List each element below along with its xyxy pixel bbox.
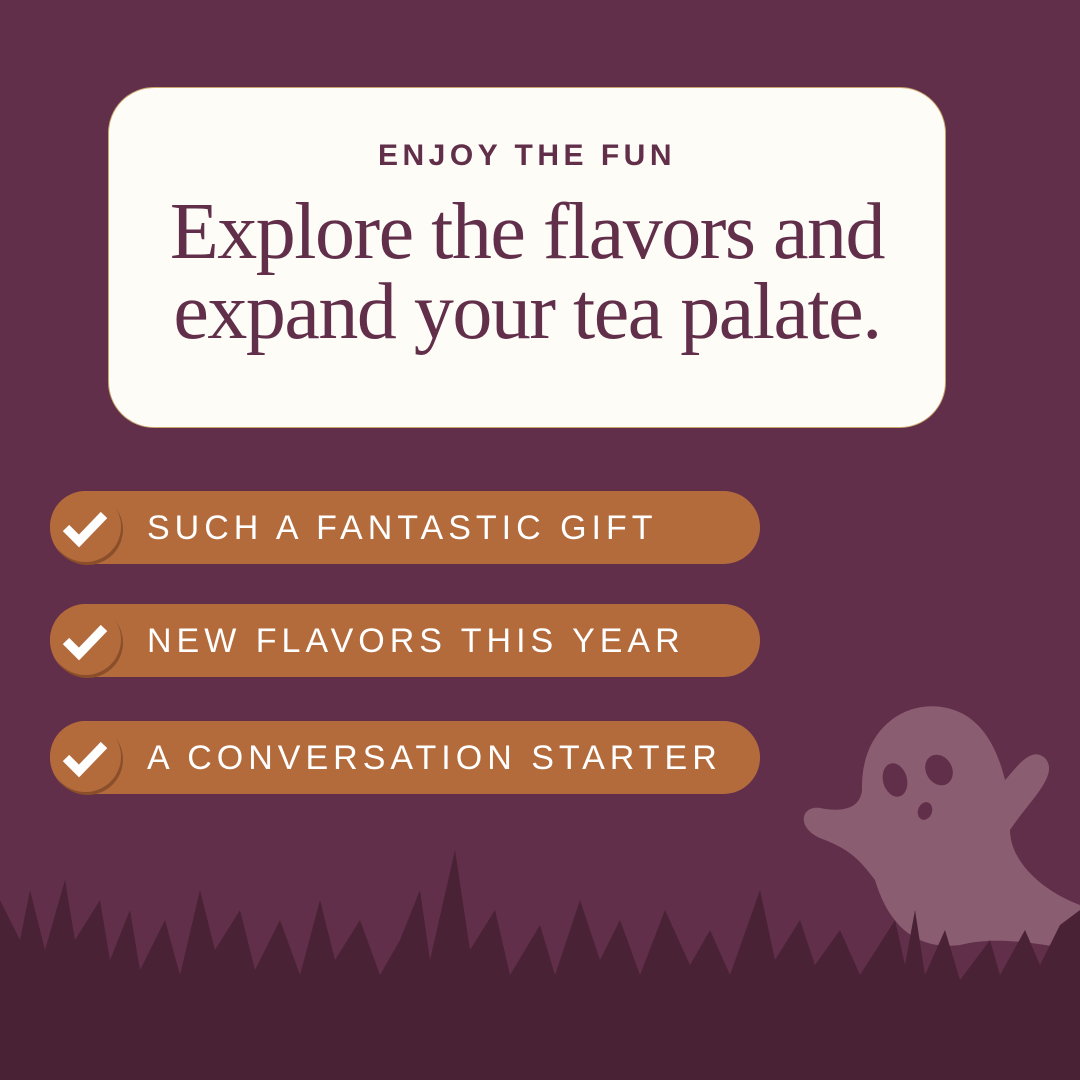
pill 3 (50, 721, 760, 794)
card: header (108, 87, 946, 428)
headline (170, 188, 885, 356)
pill 3: A CONVERSATION STARTER (147, 739, 722, 777)
kicker: ENJOY THE FUN (378, 139, 676, 172)
headline: Explore the flavors and (170, 188, 884, 276)
pill 1: SUCH A FANTASTIC GIFT (147, 509, 658, 547)
pill 2 (50, 604, 760, 677)
pill 1 (50, 491, 760, 564)
headline: expand your tea palate. (173, 268, 881, 356)
pill 2: NEW FLAVORS THIS YEAR (147, 622, 685, 660)
